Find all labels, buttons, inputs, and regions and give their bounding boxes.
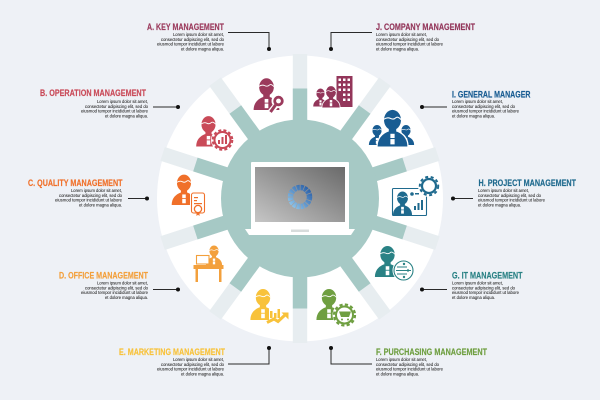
connector F	[329, 346, 372, 364]
label: I. General Manager: eiusmod tempor incididunt ut labore	[452, 108, 519, 114]
label: D. Office Management: Lorem ipsum dolor sit amet,	[97, 280, 148, 286]
label: D. Office Management: D. OFFICE MANAGEMENT	[59, 270, 148, 280]
label: D. Office Management: consectetur adipiscing elit, sed do	[85, 286, 148, 290]
label: J. Company Management	[376, 22, 476, 52]
label: A. Key Management: consectetur adipiscing elit, sed do	[161, 37, 224, 42]
label: G. IT Management: G. IT MANAGEMENT	[452, 270, 523, 280]
label: H. Project Management	[478, 178, 577, 208]
icon: project management	[392, 175, 440, 216]
connector G	[420, 288, 447, 292]
ring diagram	[157, 54, 443, 343]
label: E. Marketing Management: consectetur adipiscing elit, sed do	[161, 362, 224, 367]
label: H. Project Management: et dolore magna aliqua.	[478, 202, 521, 208]
icon: general manager	[369, 110, 414, 146]
label: E. Marketing Management: Lorem ipsum dolor sit amet,	[173, 357, 224, 362]
label: F. Purchasing Management: consectetur adipiscing elit, sed do	[376, 362, 439, 367]
connector H	[451, 196, 473, 200]
label: B. Operation Management: et dolore magna aliqua.	[105, 114, 148, 118]
label: F. Purchasing Management	[376, 347, 488, 376]
label: I. General Manager: I. GENERAL MANAGER	[452, 90, 531, 100]
label: I. General Manager: et dolore magna aliqua.	[452, 114, 495, 118]
loading spinner	[290, 188, 310, 206]
label: H. Project Management: consectetur adipiscing elit, sed do	[478, 193, 541, 198]
connector I	[420, 105, 447, 109]
label: H. Project Management: H. PROJECT MANAGEMENT	[478, 178, 577, 188]
label: F. Purchasing Management: Lorem ipsum dolor sit amet,	[376, 357, 427, 362]
label: B. Operation Management: consectetur adipiscing elit, sed do	[85, 104, 148, 109]
label: H. Project Management: Lorem ipsum dolor sit amet,	[478, 188, 529, 193]
connector E	[228, 346, 271, 364]
connector B	[153, 105, 180, 109]
icon: operation management	[196, 116, 234, 152]
label: I. General Manager: Lorem ipsum dolor sit amet,	[452, 99, 503, 104]
label: F. Purchasing Management: eiusmod tempor incididunt ut labore	[376, 366, 443, 372]
connector A	[228, 32, 271, 51]
icon: company management	[313, 76, 352, 108]
label: I. General Manager: consectetur adipiscing elit, sed do	[452, 104, 515, 109]
label: B. Operation Management: eiusmod tempor incididunt ut labore	[81, 108, 148, 114]
label: G. IT Management: consectetur adipiscing elit, sed do	[452, 286, 515, 290]
label: J. Company Management: Lorem ipsum dolor sit amet,	[376, 32, 427, 37]
label: D. Office Management: eiusmod tempor incididunt ut labore	[81, 290, 148, 295]
label: D. Office Management	[59, 270, 148, 300]
icon: quality management	[172, 175, 206, 216]
label: F. Purchasing Management: F. PURCHASING MANAGEMENT	[376, 347, 488, 357]
label: C. Quality Management: consectetur adipiscing elit, sed do	[59, 193, 122, 198]
label: C. Quality Management: Lorem ipsum dolor sit amet,	[71, 188, 122, 193]
label: J. Company Management: eiusmod tempor incididunt ut labore	[376, 42, 443, 46]
laptop	[245, 162, 355, 235]
label: E. Marketing Management	[119, 347, 226, 376]
label: E. Marketing Management: et dolore magna aliqua.	[181, 372, 224, 376]
label: C. Quality Management	[28, 178, 123, 208]
label: G. IT Management: eiusmod tempor incididunt ut labore	[452, 290, 519, 295]
label: C. Quality Management: C. QUALITY MANAGEMENT	[28, 178, 123, 188]
label: G. IT Management	[452, 270, 523, 300]
label: A. Key Management: eiusmod tempor incididunt ut labore	[157, 42, 224, 46]
connector C	[128, 196, 149, 200]
label: A. Key Management: et dolore magna aliqua.	[181, 46, 224, 52]
connector D	[153, 288, 180, 292]
label: G. IT Management: et dolore magna aliqua.	[452, 295, 495, 300]
label: B. Operation Management: B. OPERATION MANAGEMENT	[40, 88, 147, 98]
label: A. Key Management: A. KEY MANAGEMENT	[147, 22, 224, 32]
label: G. IT Management: Lorem ipsum dolor sit amet,	[452, 280, 503, 286]
icon: purchasing management	[316, 289, 358, 328]
label: J. Company Management: et dolore magna aliqua.	[376, 46, 419, 52]
label: B. Operation Management: Lorem ipsum dolor sit amet,	[97, 99, 148, 104]
connector J	[329, 32, 372, 51]
label: C. Quality Management: eiusmod tempor incididunt ut labore	[55, 198, 122, 202]
label: C. Quality Management: et dolore magna aliqua.	[79, 202, 122, 208]
label: H. Project Management: eiusmod tempor incididunt ut labore	[478, 198, 545, 202]
icon: office management	[194, 245, 224, 282]
label: A. Key Management: Lorem ipsum dolor sit amet,	[173, 32, 224, 37]
label: F. Purchasing Management: et dolore magna aliqua.	[376, 372, 419, 376]
label: D. Office Management: et dolore magna aliqua.	[105, 295, 148, 300]
label: E. Marketing Management: eiusmod tempor incididunt ut labore	[157, 366, 224, 372]
icon: key management	[254, 78, 286, 112]
label: I. General Manager	[452, 90, 531, 118]
label: A. Key Management	[147, 22, 224, 52]
icon: IT management	[375, 246, 414, 282]
label: B. Operation Management	[40, 88, 148, 118]
label: E. Marketing Management: E. MARKETING MANAGEMENT	[119, 347, 226, 357]
label: J. Company Management: consectetur adipiscing elit, sed do	[376, 37, 439, 42]
icon: marketing management	[250, 289, 289, 322]
label: J. Company Management: J. COMPANY MANAGEMENT	[376, 22, 476, 32]
